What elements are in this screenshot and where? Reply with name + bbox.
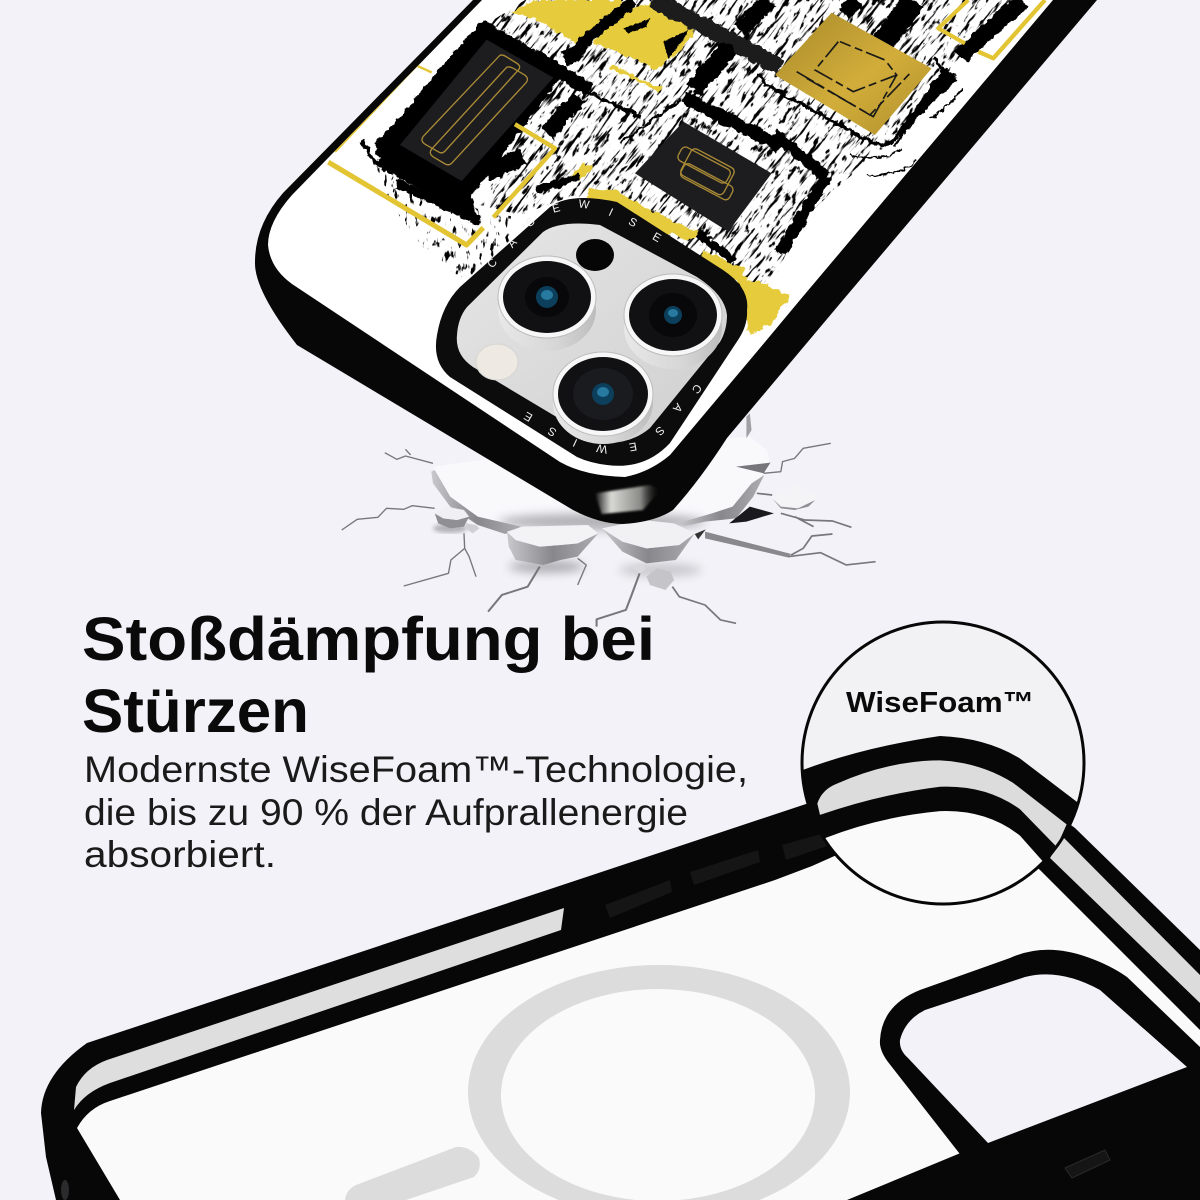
case artwork — [268, 0, 1053, 477]
magsafe ring — [468, 965, 850, 1200]
ring wordmark: A — [670, 401, 684, 414]
body text: Modernste WiseFoam™-Technologie, — [84, 749, 748, 790]
heading: Stoßdämpfung bei — [82, 605, 655, 673]
magnified frame corner — [804, 736, 1077, 861]
camera cutout — [880, 950, 1200, 1158]
ring wordmark: S — [524, 216, 538, 230]
body text: die bis zu 90 % der Aufprallenergie — [84, 792, 688, 833]
lens: bottom — [553, 352, 653, 444]
speaker hole — [61, 1180, 69, 1200]
gold outline frames — [328, 0, 1045, 245]
dark panel 2 with gold line icon — [635, 122, 772, 232]
foam strip: left — [74, 908, 564, 1110]
flash — [476, 344, 518, 380]
case frame — [41, 745, 1200, 1200]
ring wordmark: C — [486, 257, 500, 271]
lens: left — [498, 256, 596, 351]
microphone hole — [576, 239, 614, 271]
ring wordmark: I — [571, 436, 579, 448]
foam strip: right — [1050, 837, 1200, 1003]
callout label: WiseFoam™ — [846, 687, 1034, 719]
ring wordmark: E — [522, 409, 535, 423]
ring wordmark: C — [689, 381, 703, 395]
ring wordmark — [486, 198, 703, 455]
body text — [84, 749, 748, 875]
gold paint patches — [510, 0, 790, 335]
heading: Stürzen — [82, 677, 309, 745]
gold foil square — [775, 13, 932, 135]
heading — [82, 605, 655, 745]
ring wordmark: I — [607, 207, 615, 219]
clear interior — [77, 800, 1200, 1200]
body text: absorbiert. — [84, 834, 276, 875]
magsafe alignment pill — [345, 1147, 480, 1200]
black splashes on gold — [563, 18, 688, 67]
ring wordmark: W — [578, 198, 590, 212]
camera ring — [436, 198, 747, 466]
lens plate — [457, 224, 727, 443]
black brush bands — [362, 0, 1023, 260]
black ink texture — [480, 0, 1011, 286]
dark panel 1 with gold line icon — [400, 40, 553, 181]
side buttons — [605, 832, 1110, 1178]
callout: WiseFoam magnifier — [800, 620, 1086, 906]
ring wordmark: E — [628, 439, 638, 453]
ring wordmark: W — [596, 441, 609, 455]
phone: back of case with gold and black artwork — [254, 0, 1097, 524]
illustration: cracked ground impact — [342, 413, 876, 627]
ring wordmark: A — [506, 237, 520, 251]
ring wordmark: S — [652, 423, 666, 437]
phone: inside of clear case — [41, 745, 1200, 1200]
phone body — [255, 0, 1097, 524]
ring wordmark: S — [626, 216, 639, 230]
ring wordmark: E — [551, 202, 562, 216]
ring wordmark: S — [546, 424, 559, 438]
side highlights — [595, 485, 660, 514]
ring wordmark: E — [650, 231, 663, 245]
camera bump — [436, 198, 747, 466]
lens: right — [624, 274, 722, 369]
